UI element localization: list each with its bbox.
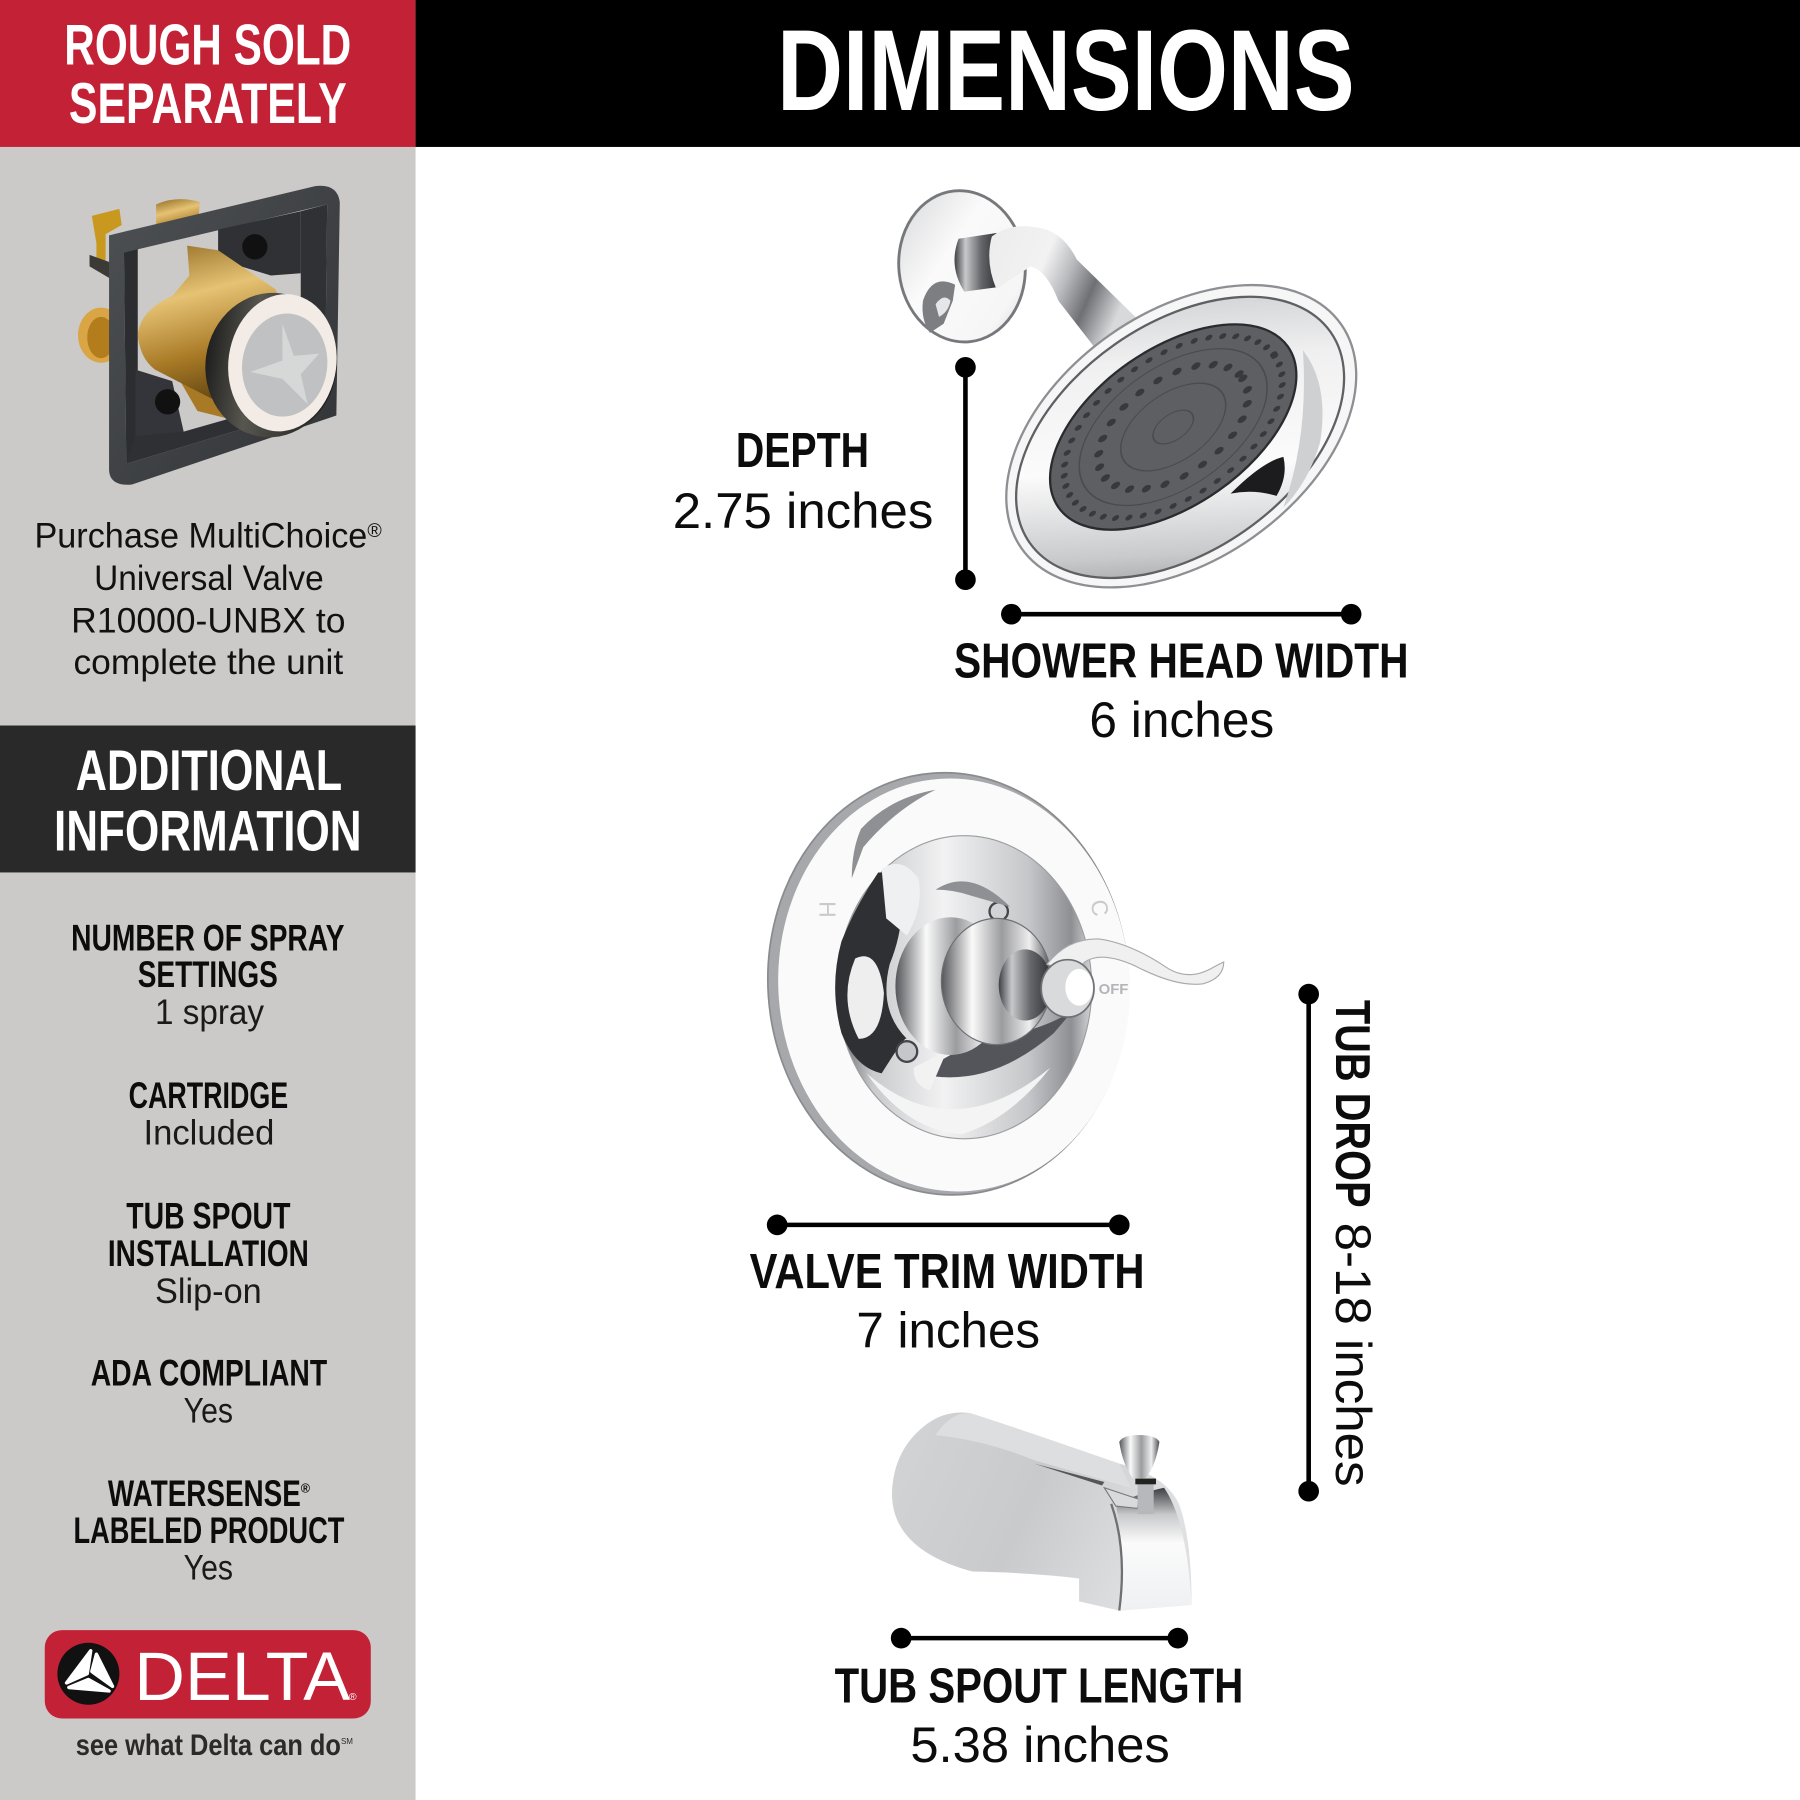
diverter knob	[1119, 1435, 1159, 1479]
dimension: valve trim width line	[767, 1215, 1130, 1235]
label: depth: DEPTH	[736, 423, 869, 478]
header: dimensions	[416, 0, 1800, 147]
label: tub spout length	[835, 1658, 1243, 1773]
front dark band	[196, 284, 346, 446]
spec: tub spout installation: Slip-on	[155, 1271, 262, 1311]
left bright reflection	[847, 956, 884, 1039]
label: tub spout length: 5.38 inches	[910, 1716, 1170, 1773]
dimension: shower head width line	[1001, 604, 1361, 624]
brass body	[138, 246, 301, 413]
label: tub drop	[1325, 1000, 1382, 1487]
label: depth: 2.75 inches	[673, 482, 933, 539]
frame right wall	[301, 204, 327, 411]
spec: tub spout installation	[108, 1195, 309, 1311]
dimension: tub drop line	[1298, 984, 1319, 1502]
spec: watersense labeled product: ®	[301, 1481, 311, 1495]
lever	[1047, 939, 1224, 984]
hub collar	[941, 918, 1052, 1045]
h marking: H	[815, 901, 841, 918]
handle cap ring	[1041, 960, 1094, 1017]
upper chrome arc	[936, 881, 1010, 907]
diverter stem	[1138, 1483, 1154, 1514]
spec: tub spout installation: INSTALLATION	[108, 1233, 309, 1274]
text: purchase note	[34, 516, 382, 682]
head chrome bowl	[964, 239, 1396, 636]
mounting screw lower	[897, 1041, 917, 1062]
label: tub drop: 8-18 inches	[1325, 1223, 1382, 1487]
spec: number of spray settings: SETTINGS	[138, 954, 278, 995]
plaster guard	[235, 308, 334, 422]
diverter collar	[1135, 1479, 1156, 1484]
spout edge	[1111, 1504, 1122, 1611]
hub ball	[999, 949, 1052, 1021]
label: valve trim width	[750, 1244, 1145, 1359]
label: shower head width: SHOWER HEAD WIDTH	[954, 633, 1409, 688]
off marking: OFF	[1099, 981, 1128, 998]
spec: cartridge	[129, 1075, 288, 1153]
highlight streak	[1034, 1464, 1104, 1485]
spec: number of spray settings: 1 spray	[155, 992, 264, 1032]
lower left block	[135, 370, 184, 436]
logo: delta	[45, 1630, 371, 1718]
right crescent reflection	[1283, 350, 1323, 507]
text: purchase note: Purchase MultiChoice	[34, 516, 367, 556]
image: tub spout	[892, 1412, 1192, 1611]
left brass fitting	[78, 308, 124, 363]
escutcheon face	[764, 767, 1144, 1203]
label: valve trim width: 7 inches	[856, 1302, 1040, 1359]
mounting screw lower	[155, 389, 180, 414]
spec: tub spout installation: TUB SPOUT	[126, 1195, 291, 1236]
frame back	[109, 186, 340, 485]
label: tub spout length: TUB SPOUT LENGTH	[835, 1658, 1243, 1713]
label: valve trim width: VALVE TRIM WIDTH	[750, 1244, 1145, 1299]
escutcheon rim	[754, 761, 1143, 1207]
spec: number of spray settings	[71, 918, 344, 1032]
wall flange	[891, 184, 1033, 348]
head reflection	[1231, 457, 1285, 496]
dish lower glow	[867, 1068, 1050, 1134]
tagline: see what Delta can do	[76, 1729, 341, 1762]
banner: rough sold separately: ROUGH SOLD	[64, 13, 351, 77]
dish reflection lower	[918, 1010, 1073, 1077]
top right block	[218, 211, 301, 276]
label: shower head width: 6 inches	[1089, 691, 1274, 748]
upper left rim shadow	[852, 790, 936, 878]
spec: number of spray settings: NUMBER OF SPRAY	[71, 918, 344, 959]
spec: cartridge: Included	[143, 1113, 274, 1153]
arm	[989, 226, 1138, 347]
handle cap	[1065, 969, 1093, 1006]
dish reflection left	[835, 872, 907, 1073]
lower white hood	[914, 1050, 947, 1091]
label: shower head width	[954, 633, 1409, 748]
banner: rough sold separately: SEPARATELY	[69, 72, 347, 136]
collar	[955, 233, 999, 292]
spec: ada compliant: Yes	[184, 1390, 233, 1430]
image: rough-in valve	[78, 186, 346, 485]
text: purchase note: Universal Valve	[94, 558, 324, 598]
hub bell	[895, 917, 1006, 1055]
spec: watersense labeled product: Yes	[184, 1548, 233, 1588]
tagline: SM	[341, 1737, 353, 1746]
back bracket	[90, 255, 115, 281]
spout body	[892, 1412, 1192, 1611]
text: purchase note: ®	[367, 520, 382, 542]
frame bottom wall	[126, 379, 325, 464]
logo: delta: ®	[349, 1692, 357, 1703]
head outer rim	[950, 223, 1412, 650]
heading: additional information	[0, 726, 416, 872]
dimension: tub spout length line	[891, 1628, 1188, 1648]
lower brass thread	[172, 367, 230, 419]
flange reflection	[922, 281, 955, 333]
spec: ada compliant: ADA COMPLIANT	[91, 1353, 328, 1394]
spray rings	[1032, 299, 1315, 555]
text: purchase note: complete the unit	[73, 642, 343, 682]
label: tub drop: TUB DROP	[1325, 1000, 1380, 1208]
banner: rough sold separately	[0, 0, 416, 147]
icon: delta mark	[57, 1643, 119, 1705]
frame opening	[124, 204, 327, 464]
panel: left sidebar	[0, 0, 416, 1800]
diverter flange	[1104, 1488, 1139, 1508]
dimension: depth line	[955, 357, 976, 590]
chrome ring	[219, 287, 345, 438]
spec: watersense labeled product	[73, 1473, 345, 1588]
spec: watersense labeled product: WATERSENSE	[108, 1473, 301, 1514]
header: dimensions: DIMENSIONS	[777, 7, 1355, 135]
text: purchase note: R10000-UNBX to	[71, 601, 346, 641]
frame left wall	[124, 249, 138, 464]
heading: additional information: ADDITIONAL	[76, 739, 342, 803]
mounting screw upper	[990, 902, 1008, 921]
image: shower head	[891, 184, 1412, 650]
spec: watersense labeled product: LABELED PRODUCT	[73, 1510, 345, 1551]
heading: additional information: INFORMATION	[54, 800, 362, 864]
spray face	[1014, 283, 1333, 571]
brass mounting ear	[92, 209, 122, 266]
top brass fitting	[156, 199, 200, 243]
dish	[837, 836, 1092, 1139]
spout front	[1116, 1488, 1192, 1611]
image: valve trim	[754, 761, 1224, 1207]
white hood	[882, 864, 920, 936]
c marking: C	[1086, 898, 1114, 918]
spec: ada compliant	[91, 1353, 328, 1430]
logo: delta: DELTA	[134, 1638, 350, 1715]
mounting screw upper	[242, 234, 267, 259]
label: depth	[673, 423, 933, 539]
upper body highlight	[936, 1413, 1131, 1488]
spec: cartridge: CARTRIDGE	[129, 1075, 288, 1116]
